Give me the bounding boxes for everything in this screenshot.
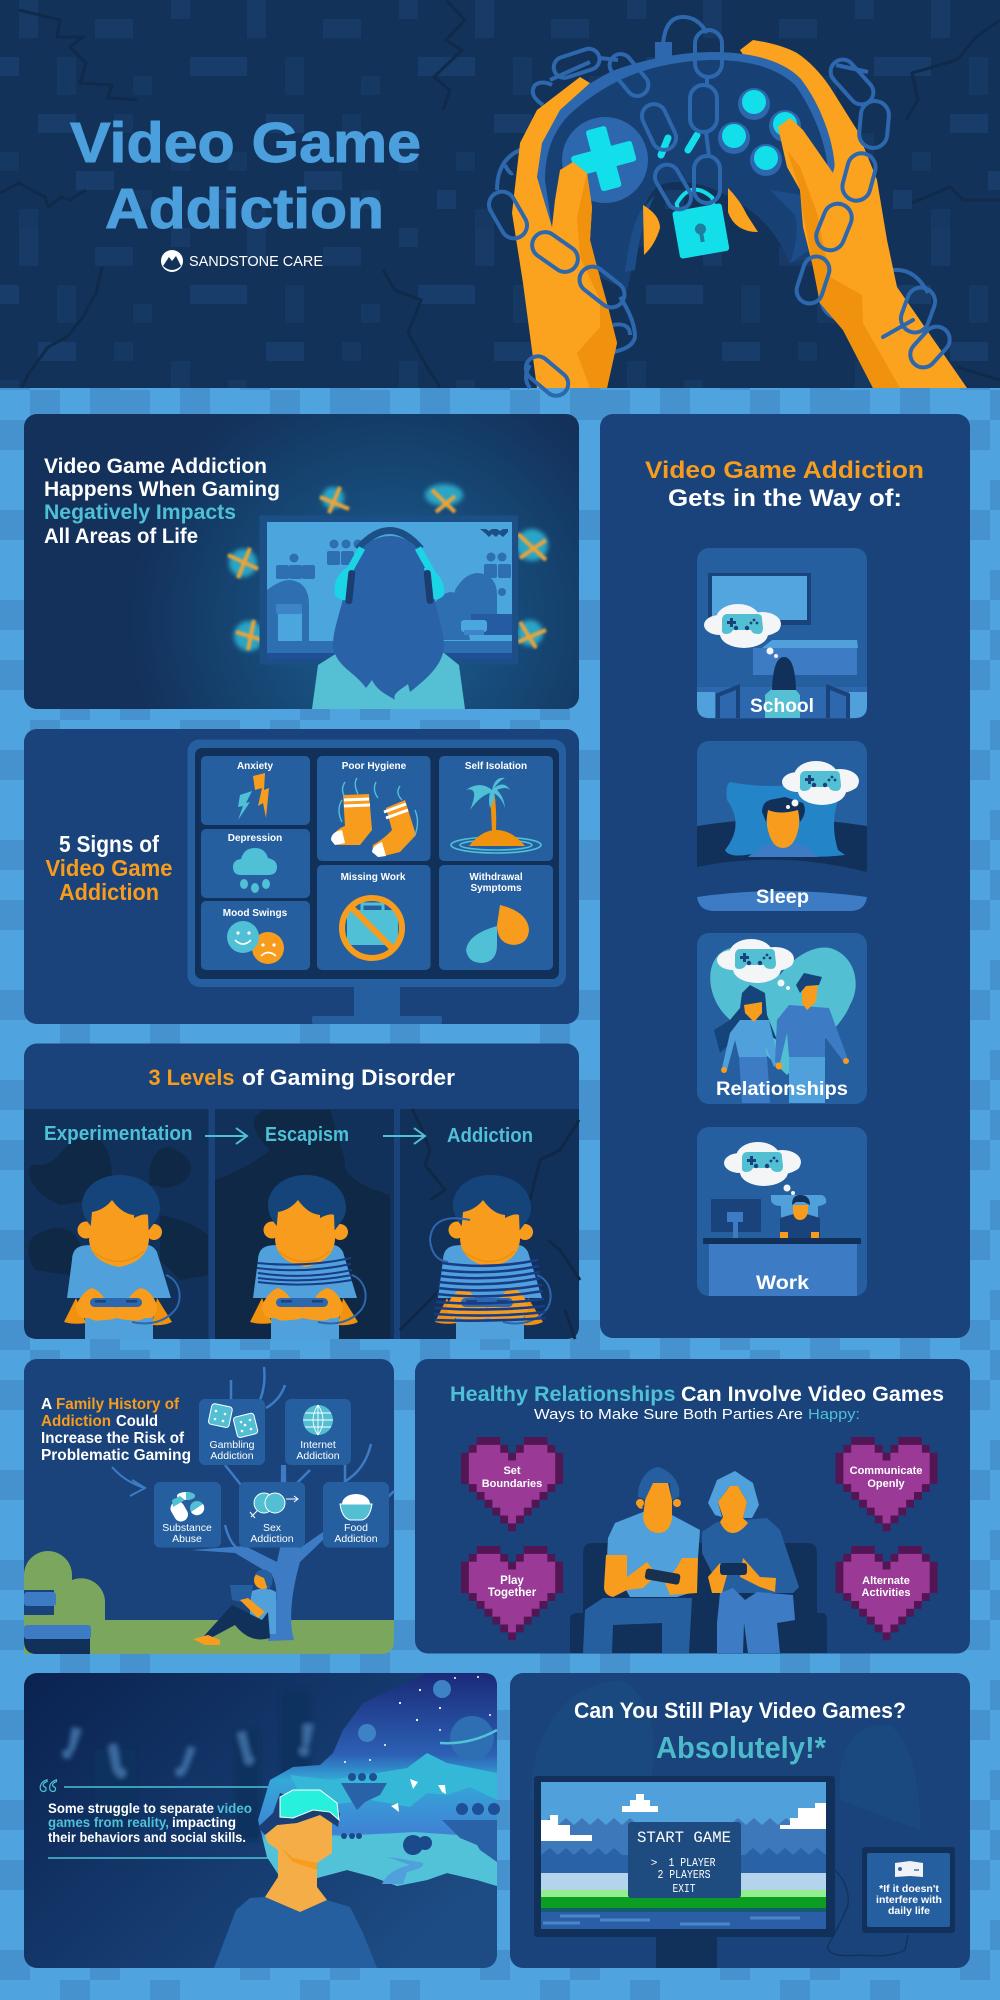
- tablet with footnote: *If it doesn't: [879, 1883, 939, 1895]
- card: sleep: [697, 741, 867, 911]
- label: Escapism: [265, 1124, 349, 1146]
- card: food addiction: Food: [344, 1522, 368, 1534]
- ground and hills: [24, 1551, 394, 1654]
- cable: [828, 1870, 908, 1956]
- heart: play together: Play: [500, 1575, 524, 1587]
- heading: 3 levels: of Gaming Disorder: [242, 1065, 455, 1090]
- card: internet addiction: Internet: [300, 1439, 336, 1451]
- sign: anxiety: [201, 756, 310, 825]
- heading: negatively impacts: Video Game Addiction: [44, 455, 267, 478]
- heart: communicate openly: Openly: [867, 1478, 906, 1490]
- card: gambling addiction: Gambling: [210, 1439, 255, 1451]
- illustration: hands holding chained controller: [484, 17, 967, 401]
- chains behind hands: [497, 17, 928, 388]
- heart: communicate openly: [836, 1437, 938, 1531]
- heart: set boundaries: [461, 1437, 563, 1531]
- heading: family history: Problematic Gaming: [41, 1447, 191, 1464]
- panel: gaming negatively impacts life: [24, 414, 579, 709]
- tablet with footnote: daily life: [888, 1905, 930, 1917]
- sign: mood swings: Mood Swings: [223, 908, 288, 919]
- heading: gets in the way: [645, 457, 924, 512]
- card: gambling addiction: [199, 1399, 265, 1465]
- heading: gets in the way: Gets in the Way of:: [668, 485, 902, 512]
- heading: 5 signs: [46, 831, 172, 905]
- sign: poor hygiene: [317, 756, 430, 861]
- heading: family history: Increase the Risk of: [41, 1430, 185, 1447]
- ropes: [434, 1260, 546, 1321]
- heading: family history: A: [41, 1396, 52, 1413]
- tv with start game screen: [534, 1776, 835, 1968]
- sign: missing work: Missing Work: [341, 872, 406, 883]
- card: sex addiction: Addiction: [250, 1533, 294, 1545]
- sign: poor hygiene: Poor Hygiene: [342, 761, 407, 772]
- heart: communicate openly: Communicate: [850, 1465, 922, 1477]
- quote text: [48, 1787, 272, 1858]
- heading: negatively impacts: Happens When Gaming: [44, 478, 280, 501]
- icons: crossed-out life areas: [228, 484, 548, 651]
- blurred background with exclamation marks: [62, 1690, 314, 1840]
- heading: family history: [41, 1396, 191, 1464]
- card: work: [697, 1127, 867, 1296]
- start menu: 2 PLAYERS: [658, 1868, 710, 1882]
- card: substance abuse: Substance: [162, 1522, 212, 1534]
- card: school: [697, 548, 867, 718]
- arrow: experimentation to escapism: [205, 1128, 247, 1144]
- right hand front: [778, 118, 967, 388]
- card: substance abuse: Abuse: [172, 1533, 202, 1545]
- heading: negatively impacts: [44, 455, 280, 548]
- gamer with headphones seen from behind: [312, 530, 465, 709]
- heart: alternate activities: Alternate: [862, 1575, 910, 1587]
- quote text: video: [217, 1801, 252, 1816]
- label: Experimentation: [44, 1123, 192, 1145]
- card: relationships: Relationships: [716, 1079, 848, 1100]
- card: sleep: Sleep: [756, 887, 809, 908]
- heading: healthy relationships: Can Involve Video Games: [681, 1383, 944, 1406]
- heart: play together: [461, 1546, 563, 1640]
- label: Addiction: [447, 1125, 533, 1147]
- title: Addiction: [105, 177, 384, 241]
- panel: header banner: [0, 0, 1000, 388]
- column: escapism: [215, 1109, 394, 1339]
- heading: healthy relationships: Ways to Make Sure Both Parties Are: [534, 1406, 803, 1423]
- title: [70, 111, 421, 241]
- heading: healthy relationships: Happy:: [808, 1406, 860, 1423]
- tablet with footnote: [862, 1847, 955, 1933]
- sign: mood swings: [201, 901, 310, 970]
- heading: negatively impacts: All Areas of Life: [44, 525, 198, 548]
- panel: healthy relationships: [415, 1359, 970, 1654]
- man: [583, 1598, 692, 1653]
- heart: set boundaries: Set: [503, 1465, 521, 1477]
- quote text: their behaviors and social skills.: [48, 1830, 246, 1845]
- figure: person reading under tree: [193, 1570, 276, 1645]
- heading: family history: Could: [116, 1413, 158, 1430]
- card: relationships: [697, 933, 867, 1104]
- heading: gets in the way: Video Game Addiction: [645, 457, 924, 484]
- card: work: Work: [756, 1273, 809, 1294]
- heading: 3 levels: [148, 1065, 455, 1090]
- sign: missing work: [317, 865, 430, 970]
- quote mark: “: [38, 1769, 58, 1820]
- card: sex addiction: Sex: [263, 1522, 282, 1534]
- card: food addiction: [323, 1482, 389, 1548]
- buttons: [738, 88, 770, 120]
- chain links in front: [484, 30, 955, 401]
- card: gambling addiction: Addiction: [210, 1450, 254, 1462]
- heading: negatively impacts: Negatively Impacts: [44, 501, 236, 524]
- figure: person in vr headset: [214, 1790, 377, 1968]
- card: sex addiction: [239, 1482, 305, 1548]
- woman: [702, 1518, 799, 1593]
- card: internet addiction: [285, 1399, 351, 1465]
- arrow: to addictions: [112, 1467, 145, 1496]
- heading: 5 signs: 5 Signs of: [59, 831, 159, 857]
- quote text: games from reality,: [48, 1815, 169, 1830]
- card: substance abuse: [154, 1482, 221, 1548]
- sign: self isolation: Self Isolation: [465, 761, 527, 772]
- start menu: 1 PLAYER: [668, 1856, 716, 1870]
- heading: healthy relationships: [450, 1383, 944, 1423]
- dreamscape scene: [258, 1673, 500, 1886]
- title: Video Game: [70, 111, 421, 175]
- quote text: Some struggle to separate: [48, 1801, 214, 1816]
- controller body: [537, 52, 835, 290]
- heading: 3 levels: 3 Levels: [148, 1065, 234, 1090]
- start menu: START GAME: [637, 1829, 731, 1847]
- heading: family history: Addiction: [41, 1413, 111, 1430]
- column: experimentation: [24, 1109, 208, 1339]
- heart: play together: Together: [488, 1587, 537, 1599]
- background silhouettes: [530, 1680, 920, 1830]
- right hand back: [740, 40, 877, 200]
- sign: self isolation: [439, 756, 553, 861]
- heading: family history: Family History of: [56, 1396, 180, 1413]
- tablet with footnote: interfere with: [876, 1894, 942, 1906]
- sign: withdrawal symptoms: Withdrawal: [469, 872, 523, 883]
- tree: [191, 1367, 394, 1641]
- card: internet addiction: Addiction: [296, 1450, 340, 1462]
- panel: 5 signs: [24, 729, 579, 1024]
- pixel clouds: [622, 1794, 658, 1812]
- heading: absolutely: Absolutely!*: [656, 1730, 827, 1765]
- heart: alternate activities: Activities: [862, 1587, 910, 1599]
- logo: Sandstone Care: SANDSTONE CARE: [189, 253, 323, 270]
- sign: anxiety: Anxiety: [237, 761, 273, 772]
- heading: 5 signs: Addiction: [59, 879, 159, 905]
- panel: separating games from reality: [24, 1673, 500, 1968]
- left hand front: [512, 77, 617, 388]
- couple on sofa: [570, 1467, 827, 1653]
- arrow: escapism to addiction: [383, 1128, 425, 1144]
- start menu: [628, 1822, 741, 1898]
- monitor: [188, 740, 566, 1024]
- sign: depression: [201, 829, 310, 898]
- logo: Sandstone Care: [161, 250, 323, 272]
- panel: 3 levels of gaming disorder: [24, 1044, 580, 1339]
- sign: withdrawal symptoms: [439, 865, 553, 970]
- start menu: EXIT: [672, 1882, 696, 1896]
- panel: family history: [24, 1359, 394, 1654]
- heading: healthy relationships: Healthy Relationships: [450, 1383, 676, 1406]
- column: addiction: [400, 1109, 580, 1339]
- quote text: impacting: [172, 1815, 236, 1830]
- padlock: [669, 185, 730, 259]
- card: school: School: [750, 696, 814, 717]
- heart: set boundaries: Boundaries: [482, 1478, 542, 1490]
- sign: withdrawal symptoms: Symptoms: [470, 883, 522, 894]
- sign: depression: Depression: [228, 833, 282, 844]
- ropes: [257, 1258, 352, 1285]
- heading: 5 signs: Video Game: [46, 855, 172, 881]
- d-pad: [562, 117, 648, 203]
- monitor with game screen: [260, 516, 518, 664]
- heart: alternate activities: [836, 1546, 938, 1640]
- card: food addiction: Addiction: [334, 1533, 378, 1545]
- heading: can you still play: Can You Still Play Video Games?: [574, 1698, 906, 1723]
- panel: can you still play: [510, 1673, 970, 1968]
- start menu: >: [651, 1858, 657, 1870]
- panel: gets in the way of: [600, 414, 970, 1338]
